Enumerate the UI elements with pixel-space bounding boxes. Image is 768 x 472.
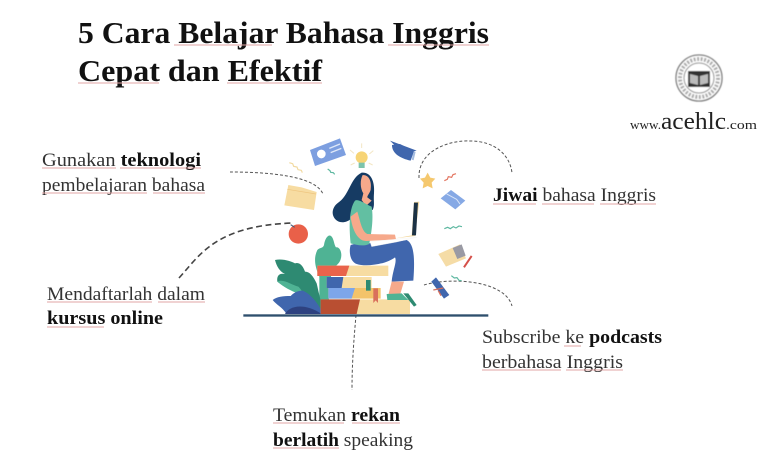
laptop bbox=[395, 202, 419, 238]
connector: kursus bbox=[179, 223, 292, 278]
title bbox=[78, 15, 489, 88]
shin and shoes bbox=[388, 282, 404, 295]
icon: light bulb bbox=[350, 143, 373, 168]
label: jiwai: Jiwai bahasa Inggris bbox=[493, 185, 656, 206]
label: teknologi: Gunakan teknologi bbox=[42, 150, 201, 171]
connector: teknologi bbox=[230, 172, 323, 194]
illustration: woman on books bbox=[243, 138, 488, 317]
website text bbox=[630, 109, 757, 135]
label: podcasts: berbahasa Inggris bbox=[482, 352, 623, 373]
left leaf bbox=[275, 260, 325, 314]
icon: graduation cap bbox=[390, 141, 417, 161]
legs bbox=[350, 240, 414, 282]
label: rekan: berlatih speaking bbox=[273, 430, 414, 451]
title: Cepat dan Efektif bbox=[78, 53, 323, 88]
ground line bbox=[243, 314, 488, 317]
hair bbox=[333, 173, 374, 222]
icon: star bbox=[420, 173, 435, 188]
woman bbox=[333, 173, 419, 307]
icon: apple bbox=[289, 224, 308, 244]
squiggles bbox=[289, 163, 462, 281]
connector: jiwai bbox=[419, 141, 512, 178]
face and neck bbox=[361, 175, 372, 206]
label: rekan bbox=[273, 405, 414, 451]
icon: book with barcode bbox=[438, 244, 472, 267]
website text: .com bbox=[726, 117, 757, 132]
logo: acehlc seal bbox=[676, 55, 722, 101]
label: teknologi: pembelajaran bahasa bbox=[42, 175, 206, 196]
label: kursus: Mendaftarlah dalam bbox=[47, 284, 205, 305]
arm bbox=[351, 212, 396, 241]
stacked books bbox=[317, 266, 410, 314]
center plant bbox=[315, 235, 341, 307]
label: kursus bbox=[47, 284, 205, 329]
label: kursus: kursus online bbox=[47, 308, 163, 329]
connector: podcasts bbox=[424, 281, 512, 306]
icon: diploma bbox=[431, 277, 449, 299]
label: rekan: Temukan rekan bbox=[273, 405, 400, 426]
label: podcasts bbox=[482, 327, 662, 373]
label: podcasts: Subscribe ke podcasts bbox=[482, 327, 662, 348]
icon: folder bbox=[284, 185, 317, 210]
label: teknologi bbox=[42, 150, 206, 196]
blue leaf bbox=[273, 291, 323, 314]
laptop base bbox=[370, 237, 417, 247]
title: 5 Cara Belajar Bahasa Inggris bbox=[78, 15, 489, 50]
website text: acehlc bbox=[661, 109, 726, 135]
plants bbox=[273, 235, 341, 314]
shirt bbox=[350, 200, 372, 245]
connector: rekan bbox=[352, 290, 358, 390]
icon: envelope bbox=[441, 190, 465, 209]
icon: id card bbox=[310, 138, 346, 166]
website text: www. bbox=[630, 117, 661, 132]
